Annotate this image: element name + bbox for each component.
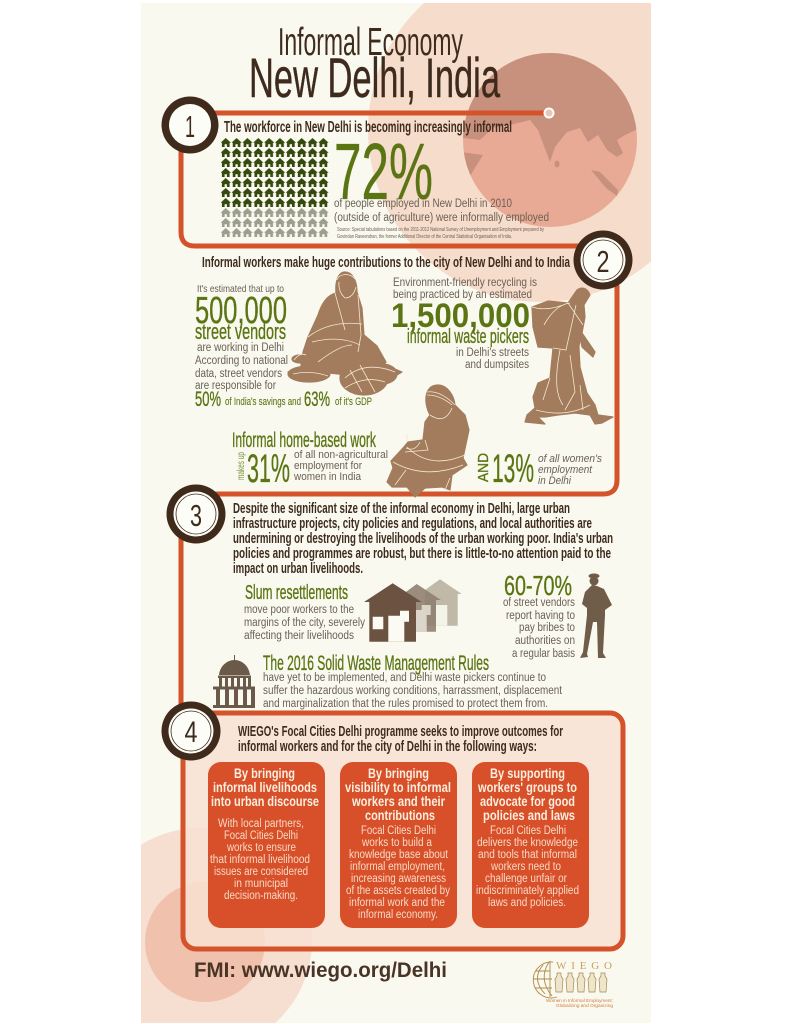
card: urban discourse: in municipal: [234, 878, 288, 890]
frame line section 2: [190, 285, 617, 494]
text: street vendors: are responsible for: [195, 380, 276, 392]
card: urban discourse: Focal Cities Delhi: [224, 830, 298, 842]
card: workers' groups: advocate for good: [480, 794, 575, 809]
text: street vendors: It's estimated that up to: [197, 283, 284, 295]
title: Informal Economy: [278, 21, 463, 64]
paragraph section 3: policies and programmes are robust, but there is little-to-no attention paid to the: [233, 545, 611, 562]
title: New Delhi, India: [249, 46, 501, 109]
icon: map marker: [544, 108, 554, 118]
text: women's employment: in Delhi: [538, 475, 571, 487]
stat: bribes: a regular basis: [512, 648, 575, 660]
illustration: police officer: [580, 574, 612, 658]
illustration: waste picker: [525, 288, 613, 424]
badge 4: 4: [184, 716, 198, 749]
text: home-based work: makes up: [236, 452, 247, 480]
paragraph section 3: impact on urban livelihoods.: [233, 560, 363, 577]
logo tagline: [546, 998, 614, 1008]
text: slum resettlements: affecting their livelihoods: [244, 630, 354, 642]
stat: bribes: report having to: [506, 610, 575, 622]
text: women's employment: 13%: [492, 447, 534, 491]
card: visibility: of the assets created by: [346, 885, 450, 897]
card: urban discourse: By bringing: [234, 766, 295, 781]
footer link: FMI: www.wiego.org/Delhi: [194, 959, 447, 982]
card: visibility: increasing awareness: [351, 873, 446, 885]
text: solid waste rules: have yet to be implemented, and Delhi waste pickers continue to: [263, 672, 546, 684]
badge 2: 2: [596, 244, 610, 279]
text: street vendors: street vendors: [195, 319, 286, 344]
text: solid waste rules: The 2016 Solid Waste Management Rules: [263, 652, 489, 675]
text: solid waste rules: [263, 652, 563, 710]
card: workers' groups: indiscriminately applied: [476, 885, 579, 897]
stat description: [334, 198, 549, 224]
stat: bribes: [503, 570, 575, 660]
stat description: (outside of agriculture) were informally employed: [334, 212, 549, 224]
card: workers' groups: and tools that informal: [478, 849, 577, 861]
badge 3: 3: [190, 498, 202, 533]
text: home-based work: Informal home-based work: [232, 429, 376, 452]
stat: bribes: authorities on: [515, 635, 575, 647]
text: home-based work: employment for: [294, 460, 362, 472]
stat: bribes: of street vendors: [503, 597, 575, 609]
text: street vendors: data, street vendors: [195, 368, 282, 380]
stat: bribes: 60-70%: [504, 570, 572, 601]
frame line section 1: [181, 113, 590, 246]
paragraph section 3: infrastructure projects, city policies and regulations, and local authorities are: [233, 515, 592, 532]
text: street vendors: are working in Delhi: [197, 342, 284, 354]
heading section 1: The workforce in New Delhi is becoming increasingly informal: [224, 119, 512, 136]
title: [249, 21, 501, 109]
card: visibility: contributions: [365, 808, 435, 823]
text: street vendors: [195, 283, 372, 411]
card: visibility: knowledge base about: [349, 849, 449, 861]
illustration: home-based worker: [387, 385, 469, 497]
logo tagline: Women in Informal Employment:: [546, 998, 613, 1003]
card: workers' groups: challenge unfair or: [485, 873, 567, 885]
logo tagline: Globalizing and Organizing: [556, 1003, 614, 1008]
text: street vendors: 500,000: [195, 290, 287, 332]
text: waste pickers: in Delhi's streets: [456, 347, 529, 359]
card: urban discourse: works to ensure: [226, 842, 296, 854]
card: visibility: Focal Cities Delhi: [361, 825, 436, 837]
card: visibility: works to build a: [361, 837, 433, 849]
source note: Source: Special tabulations based on the 2011-2012 National Survey of Unemployment and Employment prepared by: [337, 227, 544, 233]
badge 2: [574, 230, 632, 290]
card: urban discourse: that informal livelihood: [210, 854, 310, 866]
text: slum resettlements: [244, 582, 365, 642]
panel: section 3 threats: [166, 484, 613, 725]
illustration: street vendor: [288, 272, 402, 395]
card: urban discourse: [208, 762, 325, 928]
source note: Govindan Raveendran, the former Additional Director of the Central Statistical Organisation of India.: [337, 234, 512, 240]
stat description: of people employed in New Delhi in 2010: [334, 198, 512, 210]
heading section 2: Informal workers make huge contributions to the city of New Delhi and to India: [202, 254, 570, 271]
text: home-based work: women in India: [293, 471, 362, 483]
card: workers' groups: laws and policies.: [488, 897, 566, 909]
card: visibility: workers and their: [351, 794, 446, 809]
text: solid waste rules: suffer the hazardous working conditions, harrassment, displacement: [263, 685, 563, 697]
icon: houses: [364, 579, 462, 642]
logo globe: [533, 961, 557, 998]
card: workers' groups: Focal Cities Delhi: [490, 825, 566, 837]
badge 1: [162, 96, 218, 154]
intro text section 4: [238, 723, 563, 755]
frame line section 3: [178, 530, 184, 725]
text: women's employment: [475, 447, 602, 491]
stat: 72%: 72%: [334, 127, 433, 216]
card: urban discourse: informal livelihoods: [213, 780, 317, 795]
icon: government building: [213, 655, 255, 708]
badge 4: [162, 702, 220, 760]
text: waste pickers: being practiced by an estimated: [393, 287, 532, 301]
globe map of South Asia: [463, 53, 637, 227]
text: street vendors: 50%: [195, 388, 221, 411]
intro text section 4: WIEGO's Focal Cities Delhi programme seeks to improve outcomes for: [238, 723, 563, 740]
logo figures: [555, 973, 607, 992]
text: street vendors: According to national: [195, 355, 288, 367]
decorative background circles: [141, 3, 651, 1023]
card: workers' groups: By supporting: [490, 766, 565, 781]
text: home-based work: of all non-agricultural: [294, 449, 388, 461]
paragraph section 3: Despite the significant size of the informal economy in Delhi, large urban: [233, 500, 570, 517]
card: visibility: informal employment,: [350, 861, 445, 873]
text: solid waste rules: and marginalization that the rules promised to protect them from.: [263, 698, 548, 710]
text: home-based work: [232, 429, 388, 491]
pictogram: houses 72 percent: [221, 138, 329, 238]
card: visibility: informal economy.: [358, 909, 438, 921]
text: slum resettlements: margins of the city, severely: [244, 617, 365, 629]
card: visibility: informal work and the: [349, 897, 445, 909]
card: workers' groups: workers' groups to: [477, 780, 577, 795]
text: street vendors: of India's savings and: [225, 396, 301, 408]
card: workers' groups: policies and laws: [483, 808, 575, 823]
panel: section 4 WIEGO programme: [162, 702, 623, 949]
frame section 4: [183, 713, 623, 949]
text: waste pickers: and dumpsites: [465, 359, 529, 371]
logo wordmark: WIEGO: [556, 960, 612, 972]
stat: bribes: pay bribes to: [519, 622, 575, 634]
text: slum resettlements: move poor workers to the: [244, 604, 354, 616]
text: home-based work: 31%: [247, 447, 290, 491]
text: waste pickers: Environment-friendly recycling is: [393, 275, 537, 289]
text: waste pickers: informal waste pickers: [407, 326, 529, 348]
panel: section 1 workforce: [162, 96, 590, 246]
logo: WIEGO: [533, 960, 614, 1008]
paragraph section 3: [233, 500, 613, 577]
panel: section 2 contributions: [190, 230, 632, 497]
card: visibility: [340, 762, 457, 928]
text: waste pickers: [391, 275, 537, 371]
text: street vendors: 63%: [304, 388, 330, 411]
card: urban discourse: issues are considered: [214, 866, 308, 878]
text: women's employment: AND: [475, 453, 492, 482]
card: visibility: By bringing: [368, 766, 429, 781]
text: women's employment: employment: [538, 464, 593, 476]
text: street vendors: of it's GDP: [335, 396, 372, 408]
text: waste pickers: 1,500,000: [391, 297, 530, 335]
badge 3: [166, 484, 226, 544]
card: urban discourse: With local partners,: [218, 818, 304, 830]
card: urban discourse: decision-making.: [224, 890, 298, 902]
text: slum resettlements: Slum resettlements: [245, 582, 348, 604]
card: urban discourse: into urban discourse: [211, 794, 319, 809]
intro text section 4: informal workers and for the city of Delhi in the following ways:: [238, 738, 537, 755]
card: workers' groups: delivers the knowledge: [477, 837, 578, 849]
source note: [337, 227, 544, 240]
card: workers' groups: [472, 762, 589, 928]
card: workers' groups: workers need to: [490, 861, 561, 873]
badge 1: 1: [185, 109, 195, 144]
text: women's employment: of all women's: [538, 453, 602, 465]
page background: [141, 3, 651, 1023]
card: visibility: visibility to informal: [345, 780, 451, 795]
